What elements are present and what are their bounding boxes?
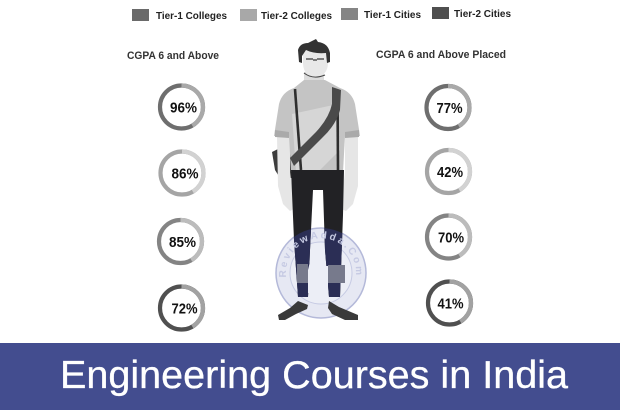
watermark emblem (279, 231, 362, 293)
hair (298, 39, 330, 63)
shoes (278, 301, 308, 320)
arms (277, 137, 296, 211)
heading: CGPA 6 and Above: CGPA 6 and Above (127, 50, 219, 62)
ring 86% (160, 152, 204, 194)
legend item: Tier-2 Colleges (240, 9, 332, 22)
neck (304, 72, 324, 96)
title banner: Engineering Courses in India (60, 354, 568, 397)
legend item: Tier-1 Colleges (132, 9, 227, 22)
ring 72%: 72% (172, 300, 198, 318)
title banner (0, 343, 620, 410)
legend item: Tier-2 Cities (432, 7, 511, 20)
shirt lighter panel (292, 104, 340, 172)
right column of rings (426, 86, 471, 324)
bag (272, 145, 293, 178)
heading: CGPA 6 and Above Placed: CGPA 6 and Above Placed (376, 49, 506, 61)
ring 42%: 42% (437, 164, 463, 181)
messenger strap (290, 87, 341, 166)
ring 41% (428, 282, 471, 324)
ring 96%: 96% (170, 100, 197, 116)
sleeve cuffs (275, 130, 359, 138)
trousers tinted by seal (294, 228, 342, 297)
ring 41%: 41% (438, 296, 464, 312)
ring 96% (160, 85, 203, 128)
legend item: Tier-1 Cities: Tier-1 Cities (364, 10, 421, 21)
thumb (308, 253, 328, 293)
legend (132, 7, 511, 22)
fist right shade (328, 265, 345, 283)
head (303, 44, 328, 78)
ring 70% (427, 216, 470, 258)
ring 85%: 85% (169, 234, 196, 251)
ring 85% (159, 220, 202, 263)
legend item: Tier-2 Colleges: Tier-2 Colleges (261, 11, 332, 22)
left column of rings (159, 85, 204, 329)
ring 70%: 70% (438, 230, 464, 246)
legend item: Tier-2 Cities: Tier-2 Cities (454, 9, 511, 20)
suspenders (295, 89, 301, 170)
trousers (291, 170, 344, 297)
legend item: Tier-1 Colleges: Tier-1 Colleges (156, 11, 227, 22)
ring 77%: 77% (436, 100, 462, 117)
glasses (306, 59, 324, 60)
ring 77% (426, 86, 470, 129)
ring 72% (160, 286, 203, 330)
shirt (274, 80, 360, 172)
legend item: Tier-1 Cities (341, 8, 421, 21)
ring 42% (427, 150, 470, 193)
ring 86%: 86% (172, 166, 198, 182)
jaw line (304, 73, 325, 77)
illustration: standing man (272, 39, 360, 320)
watermark text: ReviewAdda.Com (279, 231, 362, 277)
cuff left (297, 264, 308, 283)
watermark disc: ReviewAdda.com seal (276, 228, 366, 318)
